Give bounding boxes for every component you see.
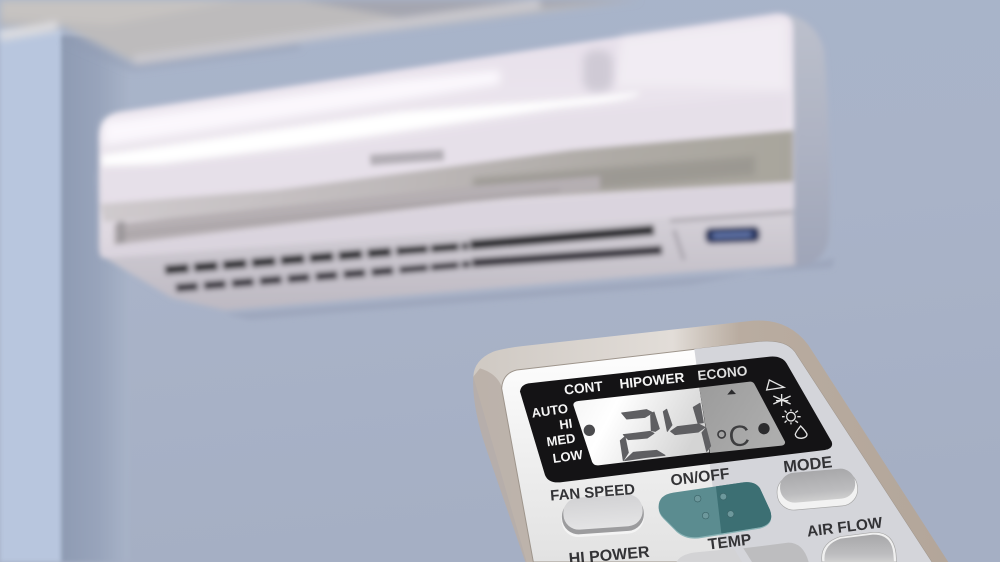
icon: snow: [773, 394, 791, 406]
remote control: [473, 320, 948, 562]
unit front cover: [99, 14, 794, 258]
icon: sun: [782, 409, 801, 424]
display labels: LOW: [552, 447, 584, 466]
display labels: CONT: [563, 379, 604, 398]
display labels: HI: [558, 416, 573, 432]
display labels: AUTO: [531, 401, 569, 421]
mode icons: [767, 380, 807, 438]
ceiling cornice: [0, 0, 640, 68]
temperature digits 24: [620, 403, 711, 461]
upper white band: [104, 70, 500, 145]
lower lip: [102, 183, 793, 258]
LCD screen right part: [699, 382, 785, 453]
face right half: [694, 341, 932, 562]
brand mark: [370, 149, 444, 166]
main glossy highlight: [102, 92, 640, 166]
lower front light tone: [102, 92, 790, 204]
button labels: MODE: [783, 453, 833, 476]
remote outer shell: [473, 320, 948, 562]
fan speed button: [560, 493, 645, 538]
on/off teal button: [659, 482, 771, 539]
display separator line: [670, 212, 792, 221]
dark reflection strip: [473, 156, 755, 200]
display labels: ECONO: [697, 363, 748, 383]
icon: water drop: [795, 426, 807, 438]
lower vent: [176, 250, 662, 288]
icon: fan: [767, 380, 784, 390]
remote face plate: [502, 341, 932, 562]
air conditioner unit: [99, 13, 835, 320]
top right glossy panel: [615, 18, 788, 92]
degrees Celsius unit: [717, 425, 749, 446]
reflection spot: [583, 50, 613, 92]
temp buttons: [677, 543, 809, 562]
degrees Celsius unit: C: [727, 419, 751, 454]
button labels: TEMP: [707, 531, 752, 554]
button labels: FAN SPEED: [550, 481, 636, 505]
wall corner column: [0, 30, 129, 562]
unit underside: [102, 205, 795, 310]
button labels: [550, 453, 884, 562]
vent hinge: [674, 230, 684, 260]
mode button: [776, 467, 859, 511]
LCD indicator dots: [584, 389, 770, 436]
button labels: AIR FLOW: [806, 514, 884, 541]
unit shadow: [225, 258, 835, 320]
unit right end cap: [770, 13, 830, 266]
display labels: MED: [546, 430, 576, 449]
LCD screen left part: [573, 388, 709, 465]
display labels: [531, 363, 748, 466]
air flow button: [822, 532, 897, 562]
button labels: ON/OFF: [670, 466, 730, 490]
remote shell side shade: [473, 368, 535, 562]
blue display badge: [705, 226, 760, 244]
taupe reflection band: [100, 130, 793, 222]
front slot: [114, 176, 600, 245]
upper vent: [165, 230, 654, 270]
slot end detail: [117, 221, 125, 243]
display labels: HIPOWER: [619, 370, 685, 392]
slot thin line: [120, 190, 560, 235]
black display panel: [520, 357, 832, 482]
